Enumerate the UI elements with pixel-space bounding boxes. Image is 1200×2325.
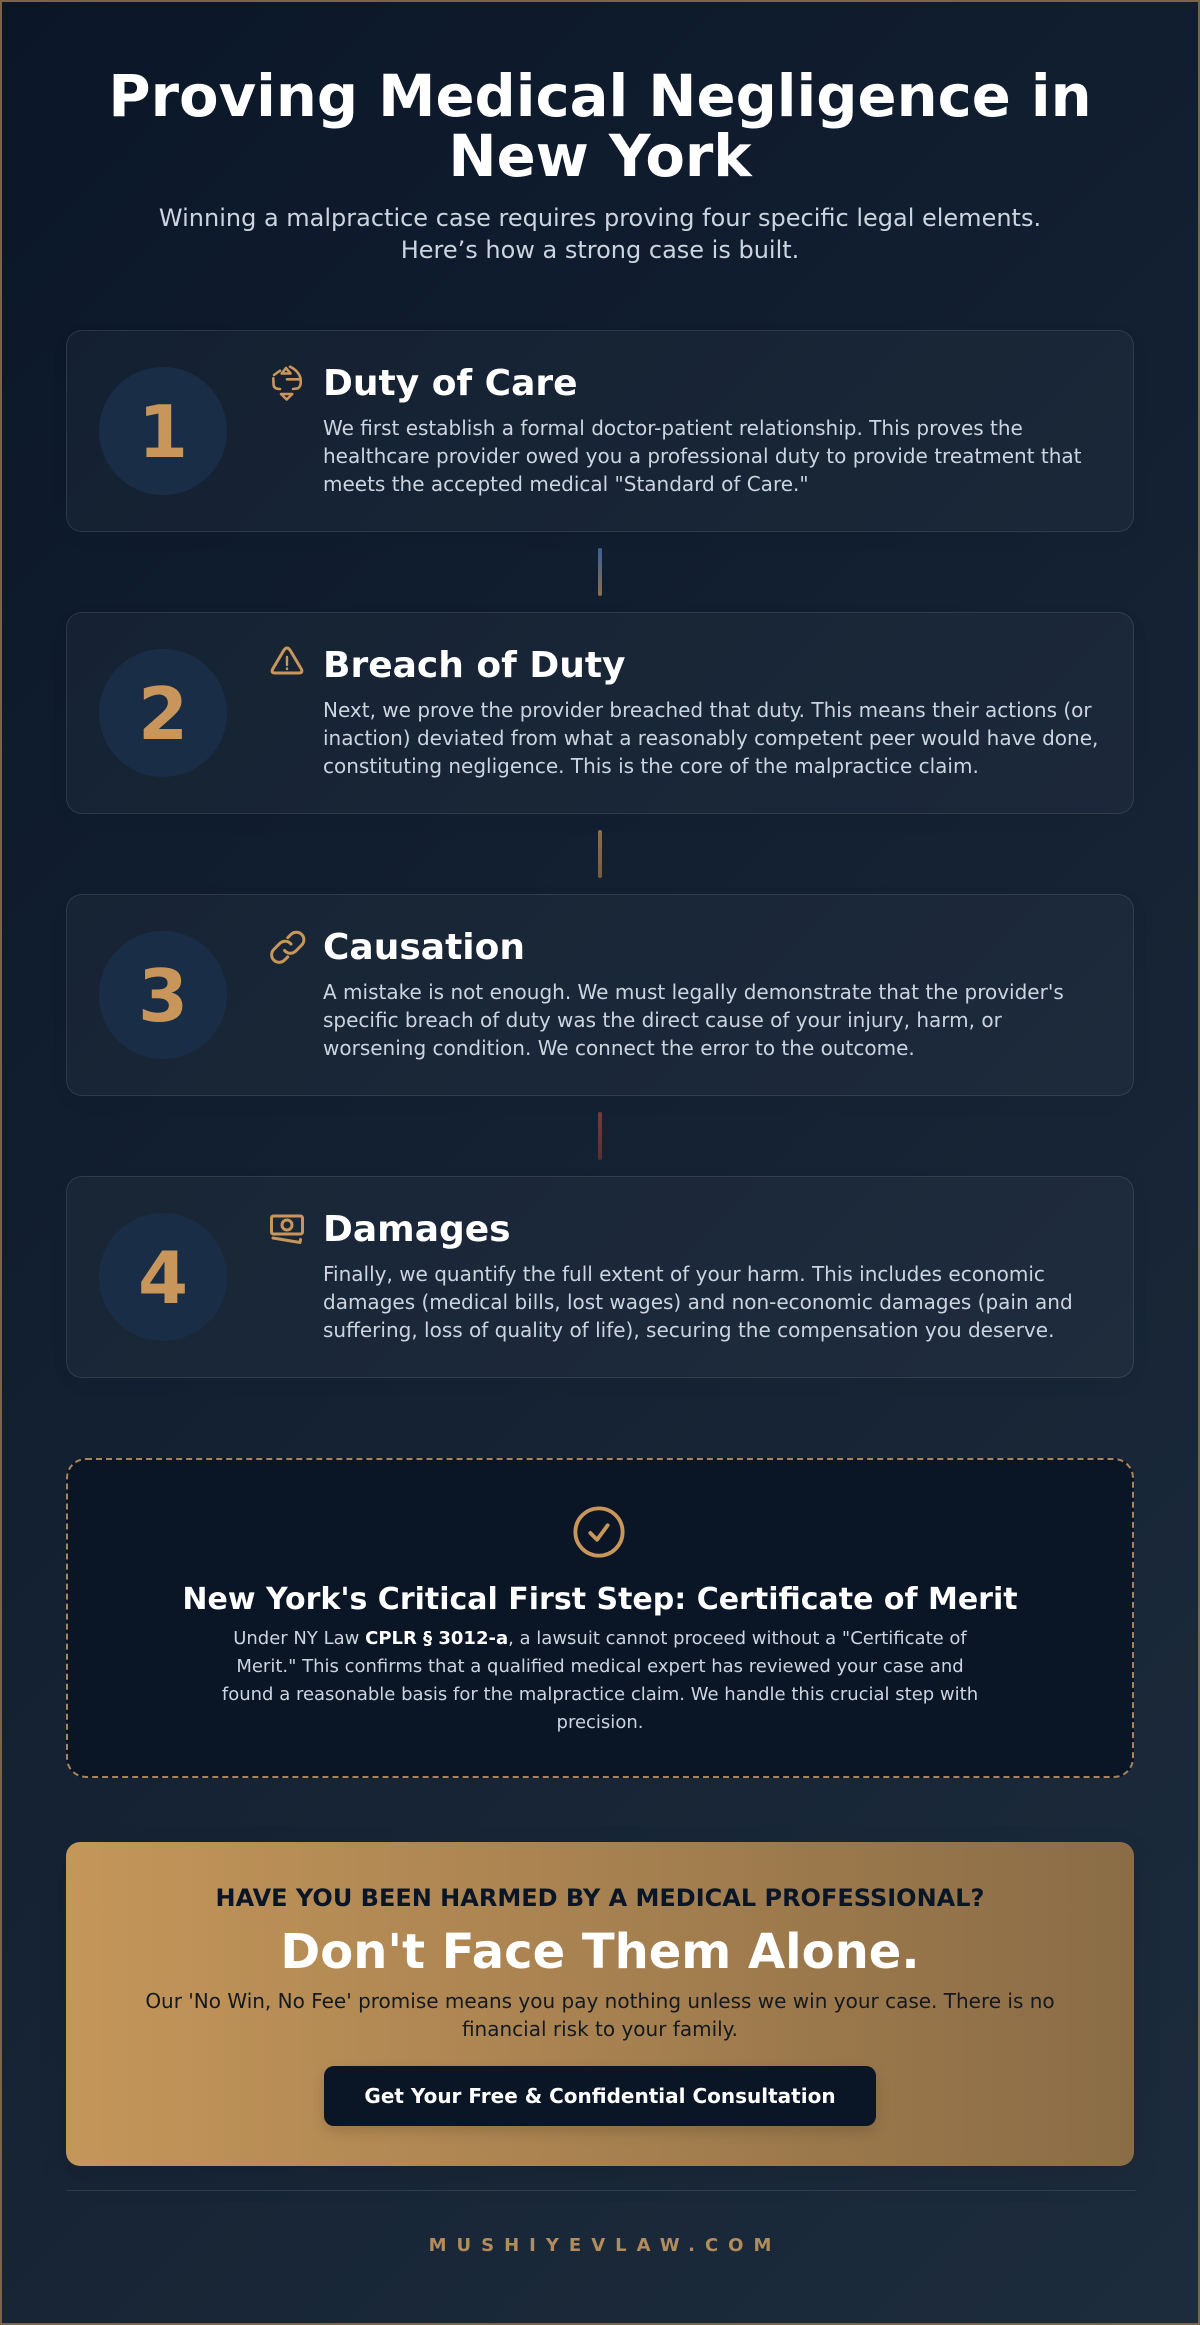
- heading: Breach of Duty: [323, 645, 626, 686]
- panel: step 3 causation: [66, 894, 1134, 1096]
- description: worsening condition. We connect the error to the outcome.: [323, 1036, 915, 1060]
- description: [222, 1628, 978, 1732]
- panel: step 4 damages: [66, 1176, 1134, 1378]
- heading: Damages: [323, 1209, 511, 1250]
- description: A mistake is not enough. We must legally demonstrate that the provider's: [323, 980, 1064, 1004]
- title: New York: [448, 123, 752, 190]
- kicker: HAVE YOU BEEN HARMED BY A MEDICAL PROFESSIONAL?: [216, 1884, 984, 1912]
- description: inaction) deviated from what a reasonably competent peer would have done,: [323, 726, 1098, 750]
- description: [323, 698, 1098, 778]
- connector 3: [598, 1112, 602, 1160]
- description: constituting negligence. This is the core of the malpractice claim.: [323, 754, 979, 778]
- description: found a reasonable basis for the malpractice claim. We handle this crucial step with: [222, 1684, 978, 1704]
- number badge 3: [99, 931, 227, 1059]
- description: financial risk to your family.: [462, 2016, 738, 2040]
- title: Proving Medical Negligence in: [108, 63, 1092, 130]
- description: suffering, loss of quality of life), securing the compensation you deserve.: [323, 1318, 1054, 1342]
- subtitle: Winning a malpractice case requires proving four specific legal elements.: [159, 204, 1041, 232]
- description: precision.: [557, 1712, 643, 1732]
- number badge 2: [99, 649, 227, 777]
- heading: New York's Critical First Step: Certificate of Merit: [182, 1582, 1018, 1616]
- panel: call to action: [66, 1842, 1134, 2166]
- icon: warning triangle: [270, 646, 304, 674]
- divider: [66, 2190, 1136, 2191]
- description: Next, we prove the provider breached that duty. This means their actions (or: [323, 698, 1092, 722]
- connector 1: [598, 548, 602, 596]
- number badge 1: 1: [138, 390, 188, 474]
- button: Get Your Free & Confidential Consultation: [364, 2084, 836, 2108]
- description: [323, 416, 1082, 496]
- heading: Causation: [323, 927, 525, 968]
- icon: banknotes: [270, 1214, 304, 1244]
- description: We first establish a formal doctor-patient relationship. This proves the: [323, 416, 1023, 440]
- panel: certificate of merit: [66, 1458, 1134, 1778]
- title: [108, 63, 1092, 190]
- description: [323, 1262, 1073, 1342]
- number badge 2: 2: [138, 672, 188, 756]
- description: [145, 1988, 1055, 2040]
- icon: check circle: [573, 1506, 625, 1558]
- headline: Don't Face Them Alone.: [280, 1924, 920, 1980]
- connector 2: [598, 830, 602, 878]
- panel: step 1 duty of care: [66, 330, 1134, 532]
- description: Under NY Law CPLR § 3012-a, a lawsuit cannot proceed without a "Certificate of: [233, 1628, 967, 1648]
- number badge 4: 4: [138, 1236, 188, 1320]
- description: Merit." This confirms that a qualified medical expert has reviewed your case and: [236, 1656, 964, 1676]
- description: specific breach of duty was the direct cause of your injury, harm, or: [323, 1008, 1002, 1032]
- panel: step 2 breach of duty: [66, 612, 1134, 814]
- number badge 1: [99, 367, 227, 495]
- description: damages (medical bills, lost wages) and non-economic damages (pain and: [323, 1290, 1073, 1314]
- icon: chain link: [270, 930, 306, 964]
- description: meets the accepted medical "Standard of Care.": [323, 472, 809, 496]
- subtitle: Here’s how a strong case is built.: [401, 236, 799, 264]
- number badge 4: [99, 1213, 227, 1341]
- description: [323, 980, 1064, 1060]
- description: Our 'No Win, No Fee' promise means you pay nothing unless we win your case. There is no: [145, 1988, 1055, 2012]
- icon: duty of care: [272, 365, 302, 401]
- heading: Duty of Care: [323, 363, 578, 404]
- button: [324, 2066, 876, 2126]
- subtitle: [159, 204, 1041, 264]
- number badge 3: 3: [138, 954, 188, 1038]
- footer website: MUSHIYEVLAW.COM: [429, 2234, 781, 2256]
- description: healthcare provider owed you a professional duty to provide treatment that: [323, 444, 1082, 468]
- description: Finally, we quantify the full extent of your harm. This includes economic: [323, 1262, 1045, 1286]
